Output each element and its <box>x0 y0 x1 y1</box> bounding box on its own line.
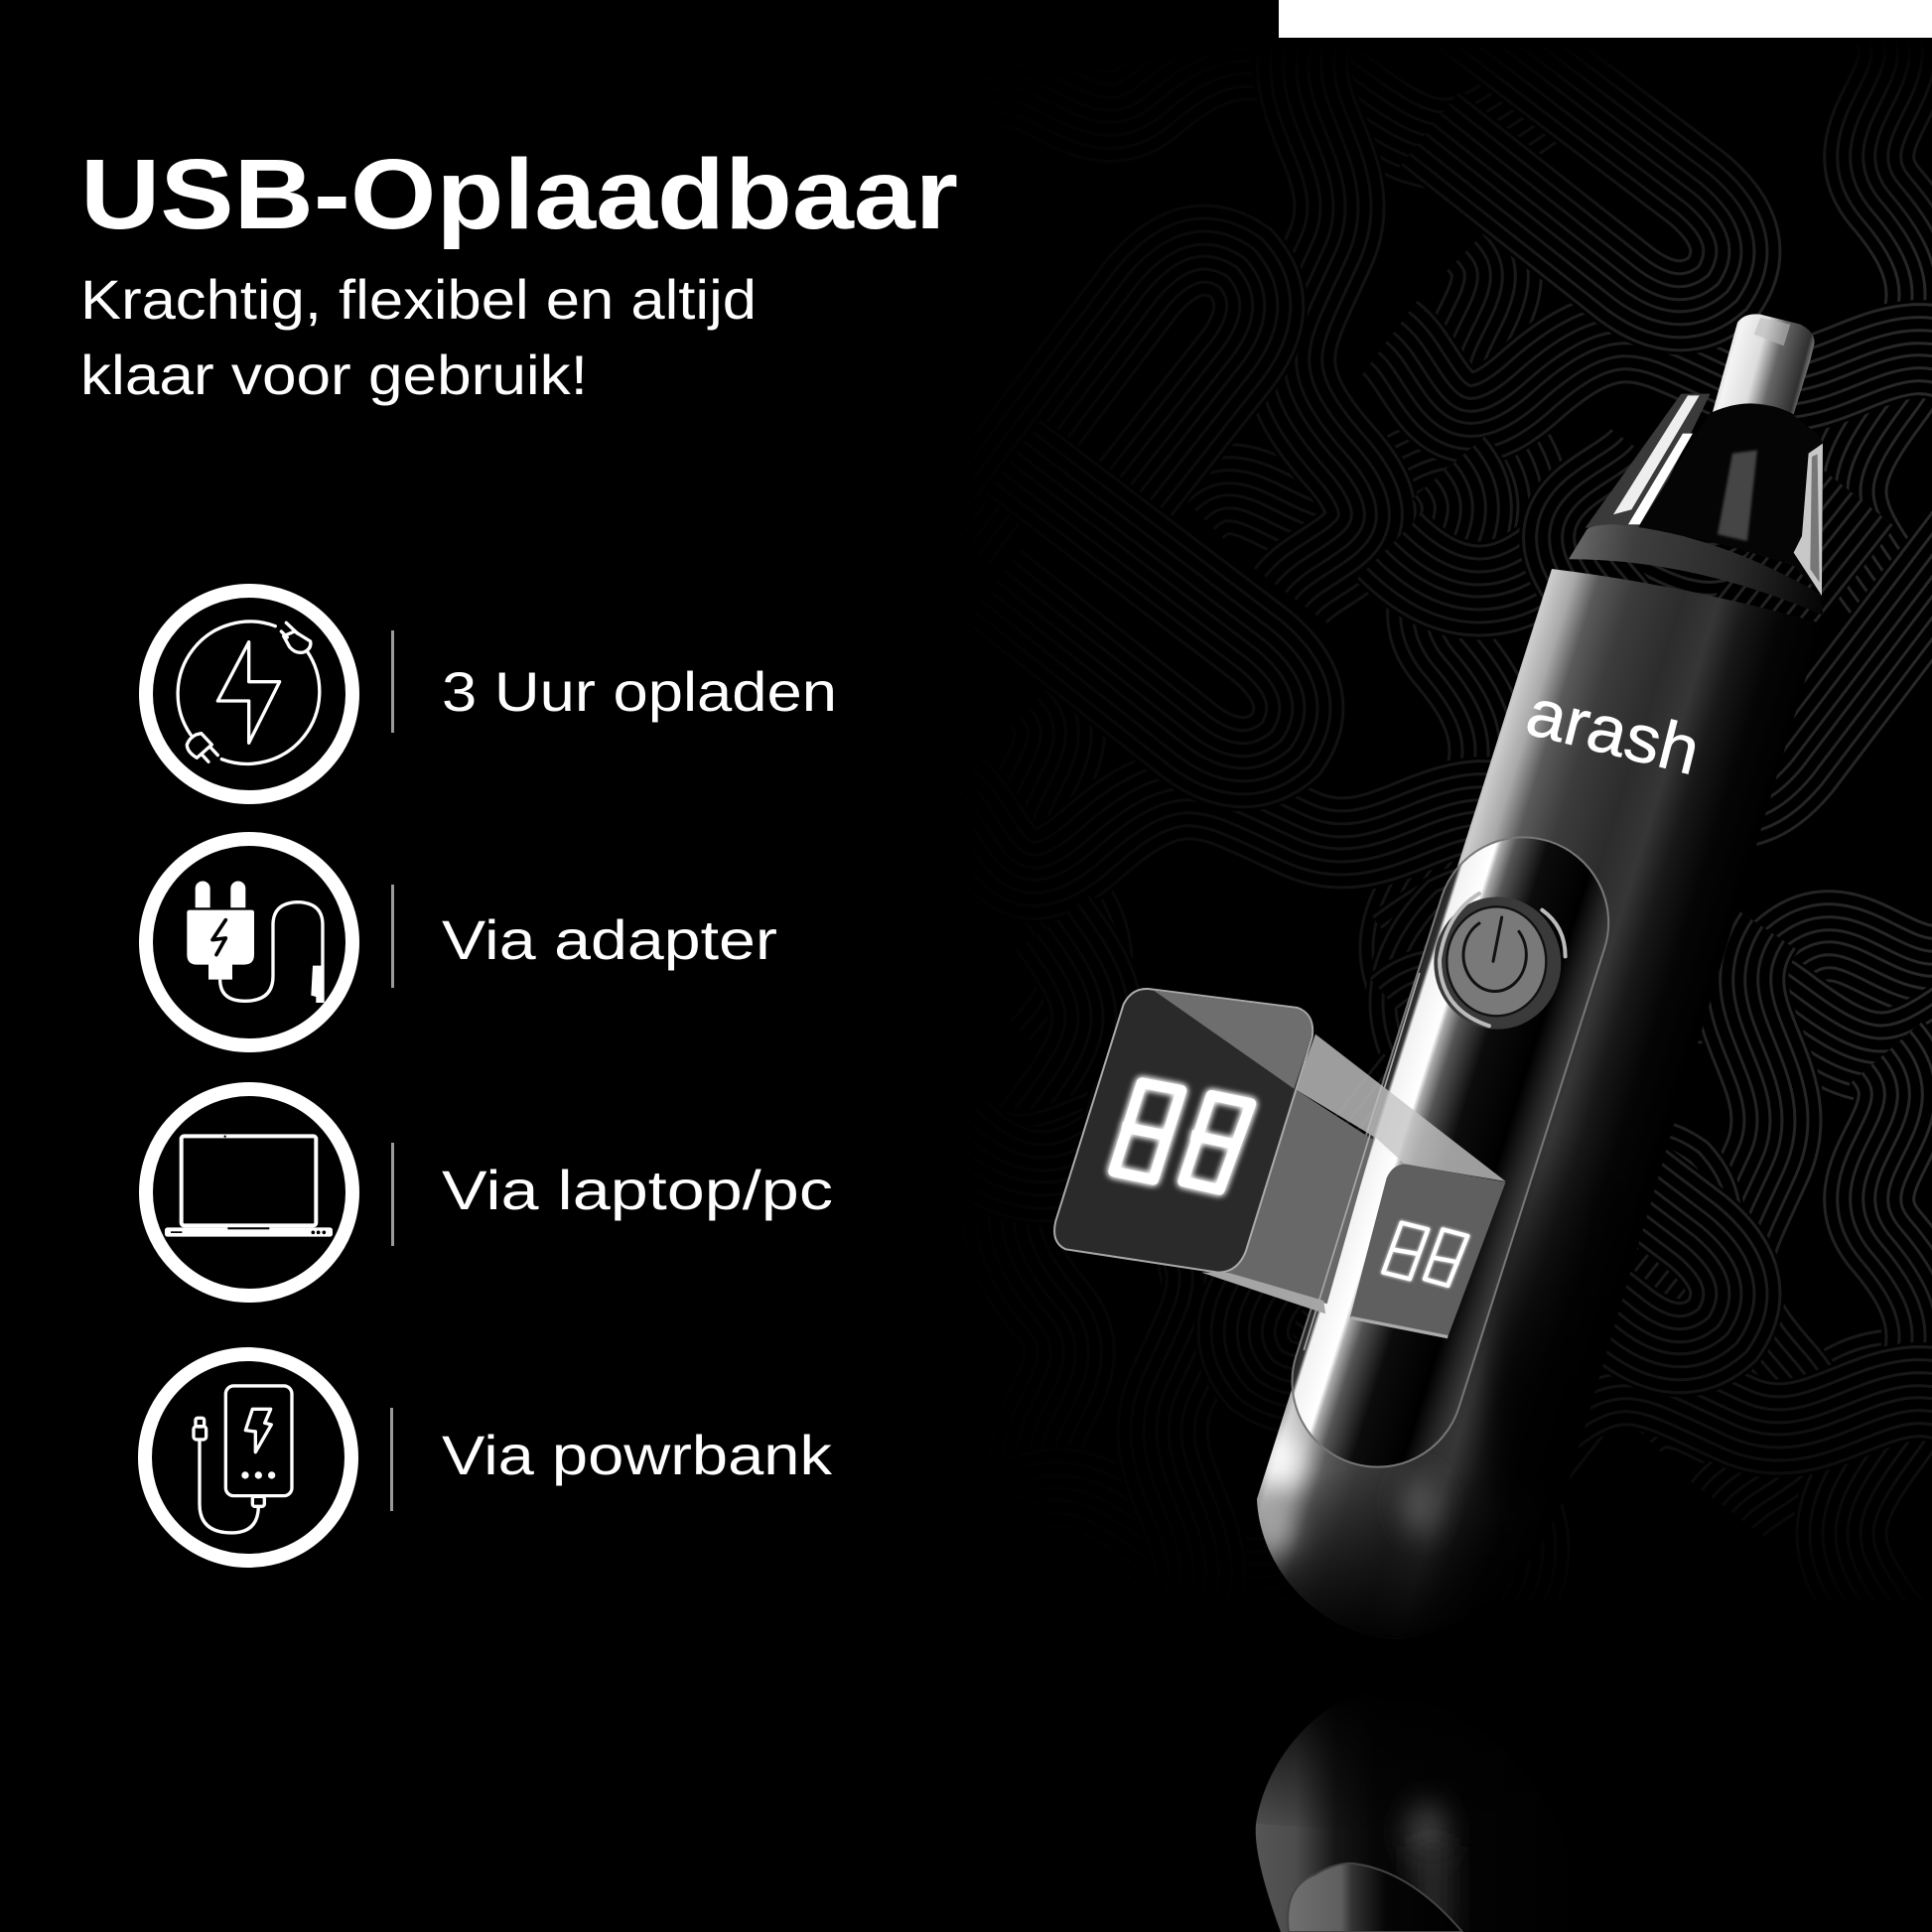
collar <box>1569 524 1824 616</box>
subtitle: klaar voor gebruik! <box>80 344 588 406</box>
label: Via adapter <box>442 908 777 971</box>
white bar top right <box>1279 0 1932 38</box>
divider <box>391 885 394 988</box>
display on device <box>1350 1165 1506 1337</box>
window edge line over beam <box>1304 973 1420 1350</box>
product: trimmer <box>1054 314 1824 1643</box>
label: Via laptop/pc <box>442 1159 833 1221</box>
icon ring <box>146 839 352 1045</box>
enlarged display <box>1054 989 1312 1273</box>
subtitle <box>80 268 757 406</box>
brand name: arash <box>1519 674 1708 789</box>
cap left strip inner <box>1628 434 1693 524</box>
title: USB-Oplaadbaar <box>80 139 958 250</box>
icon ring <box>146 1089 352 1296</box>
feature: via powerbank <box>145 1354 833 1561</box>
trimmer body <box>1257 569 1822 1639</box>
small digits glow <box>1383 1223 1467 1286</box>
feature: 3 uur opladen <box>146 591 837 797</box>
icon ring <box>145 1354 351 1561</box>
label: Via powrbank <box>442 1424 833 1486</box>
display window <box>1271 815 1630 1489</box>
reflected highlight <box>1407 1800 1447 1863</box>
button face <box>1447 906 1546 1016</box>
tip opening <box>1754 318 1790 345</box>
enlarged digits <box>1114 1083 1251 1189</box>
metal tip <box>1713 314 1815 414</box>
reflected shine trail <box>1415 1847 1450 1932</box>
small digits <box>1383 1223 1467 1286</box>
icon: powerbank with cable <box>194 1386 292 1533</box>
divider <box>391 630 394 733</box>
beam top face <box>1296 1035 1506 1181</box>
reflected window <box>1288 1863 1462 1932</box>
reflected top fade <box>1256 1693 1566 1844</box>
feature: via adapter <box>146 839 777 1045</box>
trimmer head <box>1569 314 1824 616</box>
cap translucent side <box>1586 394 1711 528</box>
cap interior <box>1638 404 1824 596</box>
beam bottom face <box>1201 1273 1325 1313</box>
body shading <box>1231 1142 1727 1643</box>
label: 3 Uur opladen <box>442 660 837 723</box>
icon: laptop <box>165 1135 333 1237</box>
display glass reflection <box>1154 990 1311 1089</box>
icon: charging bolt with plugs <box>178 621 320 763</box>
power symbol <box>1463 923 1526 991</box>
bezel highlight arcs <box>1440 894 1566 1026</box>
projection beam and displays <box>1054 973 1506 1350</box>
icon: adapter with cable <box>187 881 325 1003</box>
power button <box>1434 894 1566 1030</box>
cap right chrome <box>1794 444 1823 596</box>
display bottom edge <box>1351 1317 1448 1337</box>
beam side face <box>1228 1089 1373 1304</box>
icon ring <box>146 591 352 797</box>
cap right chrome inner <box>1810 454 1820 583</box>
reflected body <box>1256 1693 1588 1932</box>
divider <box>390 1408 393 1511</box>
divider <box>391 1143 394 1246</box>
cap left strip outer <box>1613 395 1700 514</box>
background wave pattern <box>1122 69 1932 1537</box>
subtitle: Krachtig, flexibel en altijd <box>80 268 757 331</box>
button bezel <box>1434 897 1561 1030</box>
power symbol stem <box>1493 917 1502 961</box>
feature: via laptop/pc <box>146 1089 833 1296</box>
product reflection <box>1256 1693 1588 1932</box>
cap inner shine <box>1718 450 1757 541</box>
